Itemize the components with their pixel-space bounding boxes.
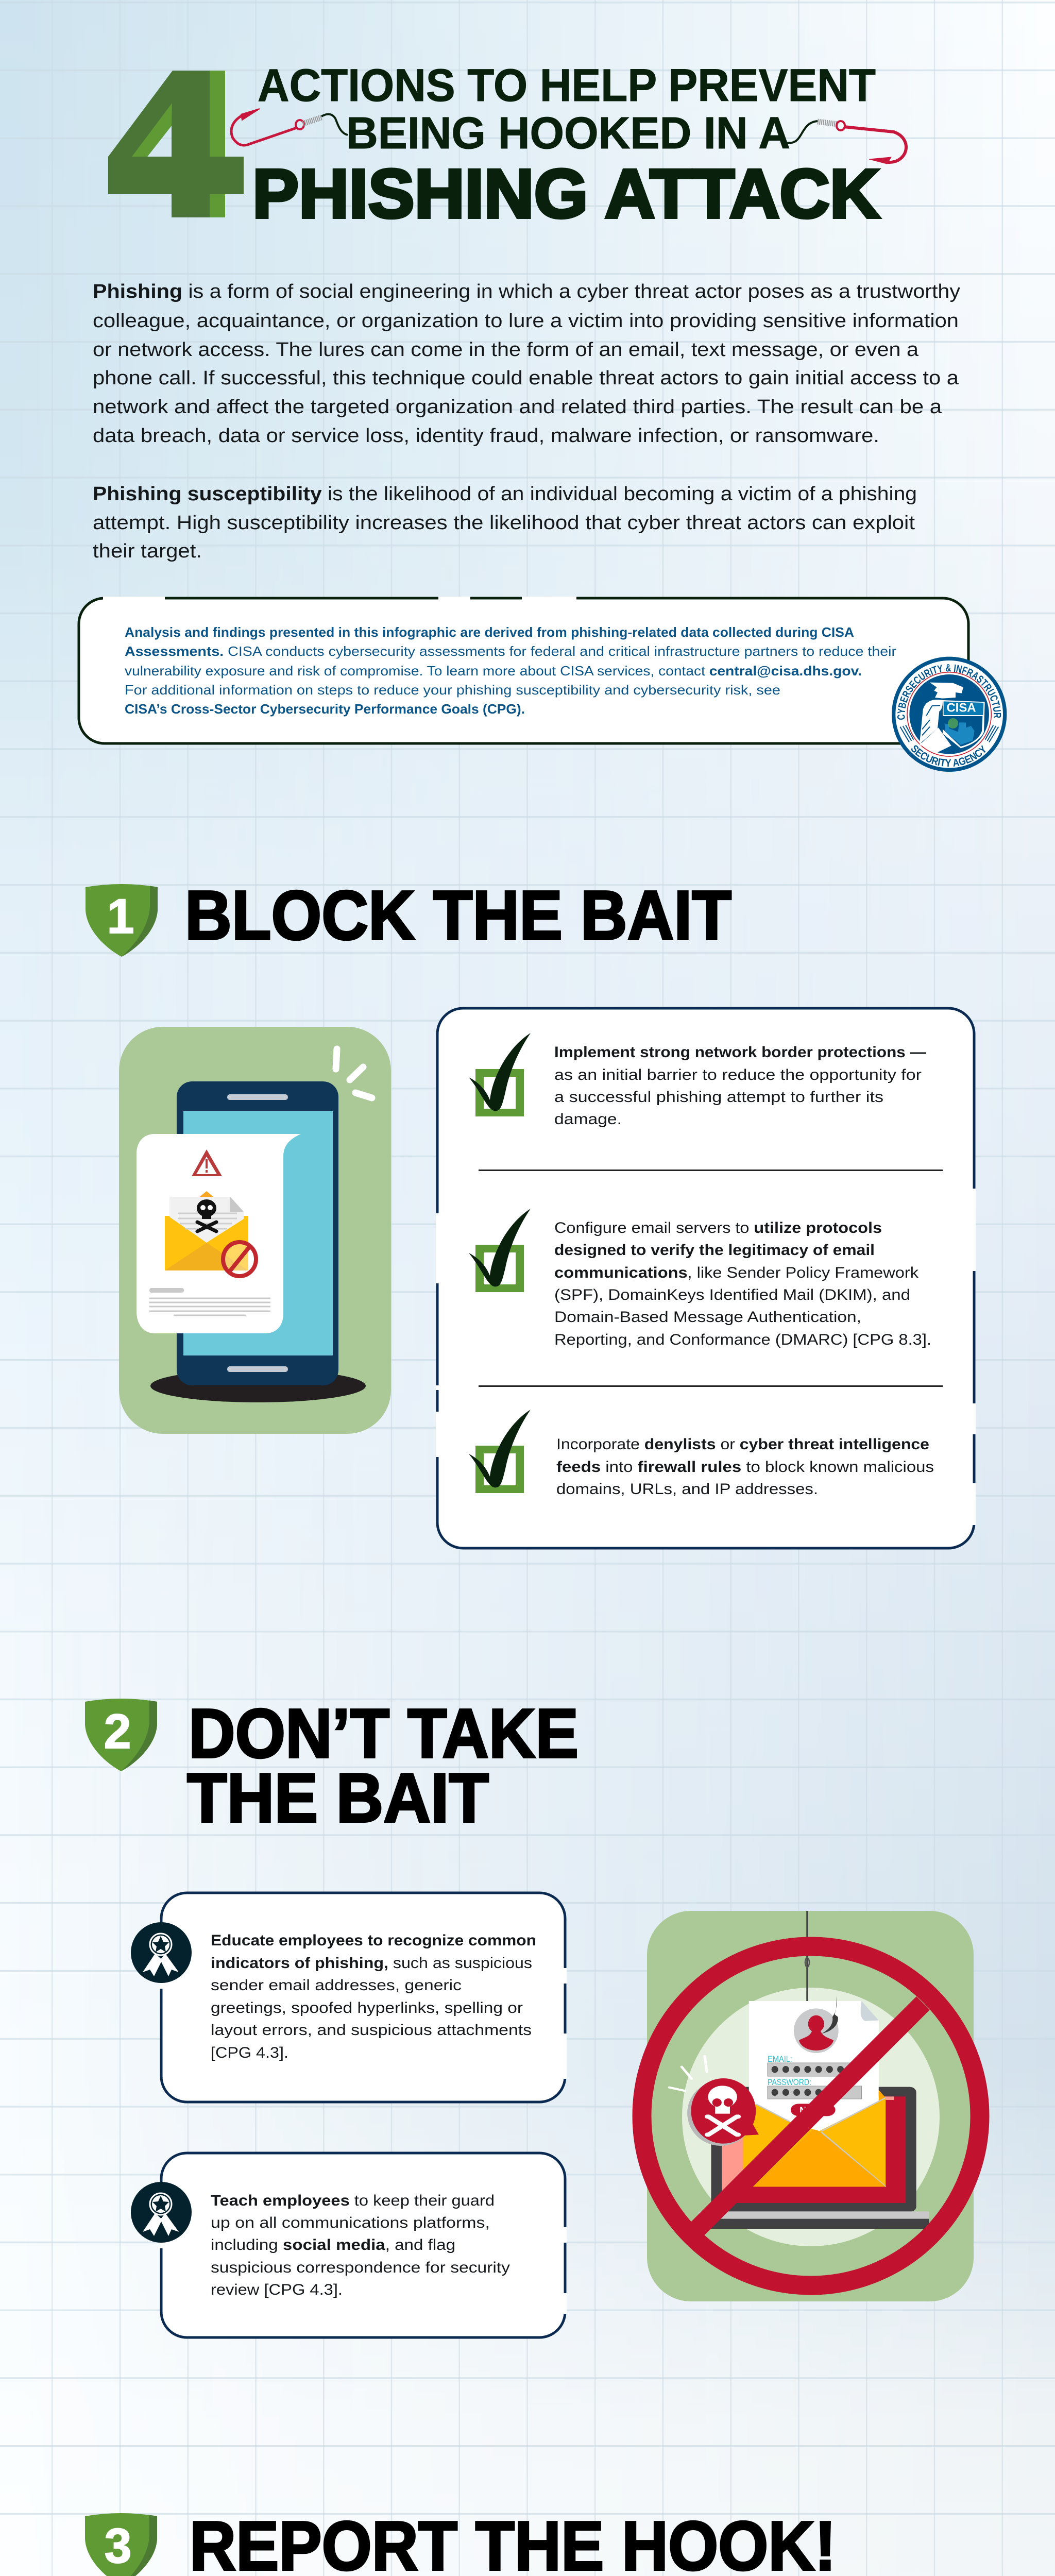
illustration: prohibited phishing laptop <box>642 1911 980 2301</box>
intro text: phishing susceptibility: Phishing susceptibility is the likelihood of an individual becoming a victim of a phishing <box>93 483 917 505</box>
text block: suspicious correspondence for security <box>211 2259 510 2276</box>
panel: CISA assessment note <box>79 597 968 743</box>
intro text: phishing definition: or network access. The lures can come in the form of an email, text message, or even a <box>93 339 919 361</box>
section 2 badge <box>85 1699 157 1771</box>
icon: award ribbon <box>131 1922 192 1983</box>
text block <box>211 2192 510 2298</box>
action: email authentication protocols: designed to verify the legitimacy of email <box>554 1242 875 1259</box>
title <box>108 59 906 232</box>
text block: up on all communications platforms, <box>211 2214 490 2231</box>
section 3 badge: 3 <box>105 2519 131 2573</box>
illustration: phone with phishing email <box>119 1027 391 1434</box>
intro text: phishing susceptibility: attempt. High susceptibility increases the likelihood that cyber threat actors can exploit <box>93 512 915 534</box>
illustration: prohibited phishing laptop: EMAIL: <box>768 2054 792 2064</box>
illustration: prohibited phishing laptop: PASSWORD: <box>768 2077 811 2087</box>
icon: award ribbon <box>131 2182 192 2243</box>
panel: CISA assessment note: CISA’s Cross-Sector Cybersecurity Performance Goals (CPG). <box>125 701 525 717</box>
intro text: phishing susceptibility <box>93 483 917 562</box>
icon: CISA seal: SECURITY AGENCY <box>911 745 986 767</box>
icon: CISA seal <box>892 656 1007 772</box>
section 1 badge: 1 <box>107 889 134 944</box>
icon: right fish hook <box>787 121 906 164</box>
panel: block the bait actions <box>436 1008 976 1548</box>
text block <box>211 1932 536 2061</box>
intro text: phishing definition: Phishing is a form of social engineering in which a cyber threat actor poses as a trustworthy <box>93 281 960 302</box>
action: denylists and threat feeds <box>469 1410 934 1498</box>
panel: CISA assessment note: Analysis and findings presented in this infographic are derived from phishing-related data collected during CISA <box>125 624 854 640</box>
section 2 heading: DON’T TAKE <box>189 1694 578 1772</box>
text block: Teach employees to keep their guard <box>211 2192 495 2209</box>
action: network border protections <box>469 1033 926 1128</box>
intro text: phishing susceptibility: their target. <box>93 540 202 562</box>
text block: layout errors, and suspicious attachments <box>211 2022 532 2039</box>
action: denylists and threat feeds: feeds into firewall rules to block known malicious <box>556 1459 934 1476</box>
action: email authentication protocols: (SPF), DomainKeys Identified Mail (DKIM), and <box>554 1286 910 1303</box>
action: email authentication protocols: Domain-Based Message Authentication, <box>554 1309 861 1326</box>
section 2 heading: THE BAIT <box>187 1759 489 1837</box>
panel: CISA assessment note: Assessments. CISA conducts cybersecurity assessments for federal and critical infrastructure partners to reduce their <box>125 643 896 659</box>
title line 3: PHISHING ATTACK <box>252 156 880 232</box>
text block: Educate employees to recognize common <box>211 1932 536 1949</box>
action: network border protections: as an initial barrier to reduce the opportunity for <box>554 1066 922 1083</box>
text block: indicators of phishing, such as suspicious <box>211 1955 532 1972</box>
intro text: phishing definition: colleague, acquaintance, or organization to lure a victim into providing sensitive information <box>93 310 959 332</box>
text block: review [CPG 4.3]. <box>211 2281 343 2298</box>
title line 1: ACTIONS TO HELP PREVENT <box>258 59 876 111</box>
title line 2: BEING HOOKED IN A <box>346 108 790 158</box>
panel: CISA assessment note: For additional information on steps to reduce your phishing susceptibility and cybersecurity risk, see <box>125 682 780 698</box>
action: denylists and threat feeds: domains, URLs, and IP addresses. <box>556 1481 818 1498</box>
intro text: phishing definition: network and affect the targeted organization and related third parties. The result can be a <box>93 396 942 418</box>
action: network border protections: Implement strong network border protections — <box>554 1044 926 1061</box>
panel: CISA assessment note: vulnerability exposure and risk of compromise. To learn more about CISA services, contact central@cisa.dhs.gov. <box>125 663 862 679</box>
action: network border protections: a successful phishing attempt to further its <box>554 1089 883 1106</box>
intro text: phishing definition: data breach, data or service loss, identity fraud, malware infection, or ransomware. <box>93 425 879 447</box>
section 2 heading <box>187 1694 578 1837</box>
icon: CISA seal: CISA <box>946 701 976 715</box>
section 3 badge <box>85 2513 157 2576</box>
action: email authentication protocols <box>469 1209 931 1348</box>
intro text: phishing definition: phone call. If successful, this technique could enable threat actors to gain initial access to a <box>93 367 959 389</box>
intro text: phishing definition <box>93 281 960 447</box>
section 1 badge <box>86 884 158 957</box>
action: email authentication protocols: communications , like Sender Policy Framework <box>554 1264 919 1281</box>
text block: sender email addresses, generic <box>211 1977 462 1994</box>
action: network border protections: damage. <box>554 1111 622 1128</box>
panel: educate employees <box>131 1893 567 2102</box>
text block: greetings, spoofed hyperlinks, spelling or <box>211 1999 523 2016</box>
text block: [CPG 4.3]. <box>211 2044 288 2061</box>
section 1 heading: BLOCK THE BAIT <box>185 876 731 954</box>
icon: big numeral 4 <box>108 71 244 217</box>
panel: teach employees <box>131 2153 567 2337</box>
action: email authentication protocols: Reporting, and Conformance (DMARC) [CPG 8.3]. <box>554 1331 931 1348</box>
illustration: prohibited phishing laptop: NEXT <box>799 2106 825 2116</box>
section 2 badge: 2 <box>104 1704 131 1759</box>
text block: including social media , and flag <box>211 2236 455 2253</box>
icon: CISA seal: CYBERSECURITY & INFRASTRUCTURE <box>897 664 1001 720</box>
icon: left fish hook <box>231 109 348 145</box>
action: email authentication protocols: Configure email servers to utilize protocols <box>554 1219 882 1236</box>
action: denylists and threat feeds: Incorporate denylists or cyber threat intelligence <box>556 1436 929 1453</box>
